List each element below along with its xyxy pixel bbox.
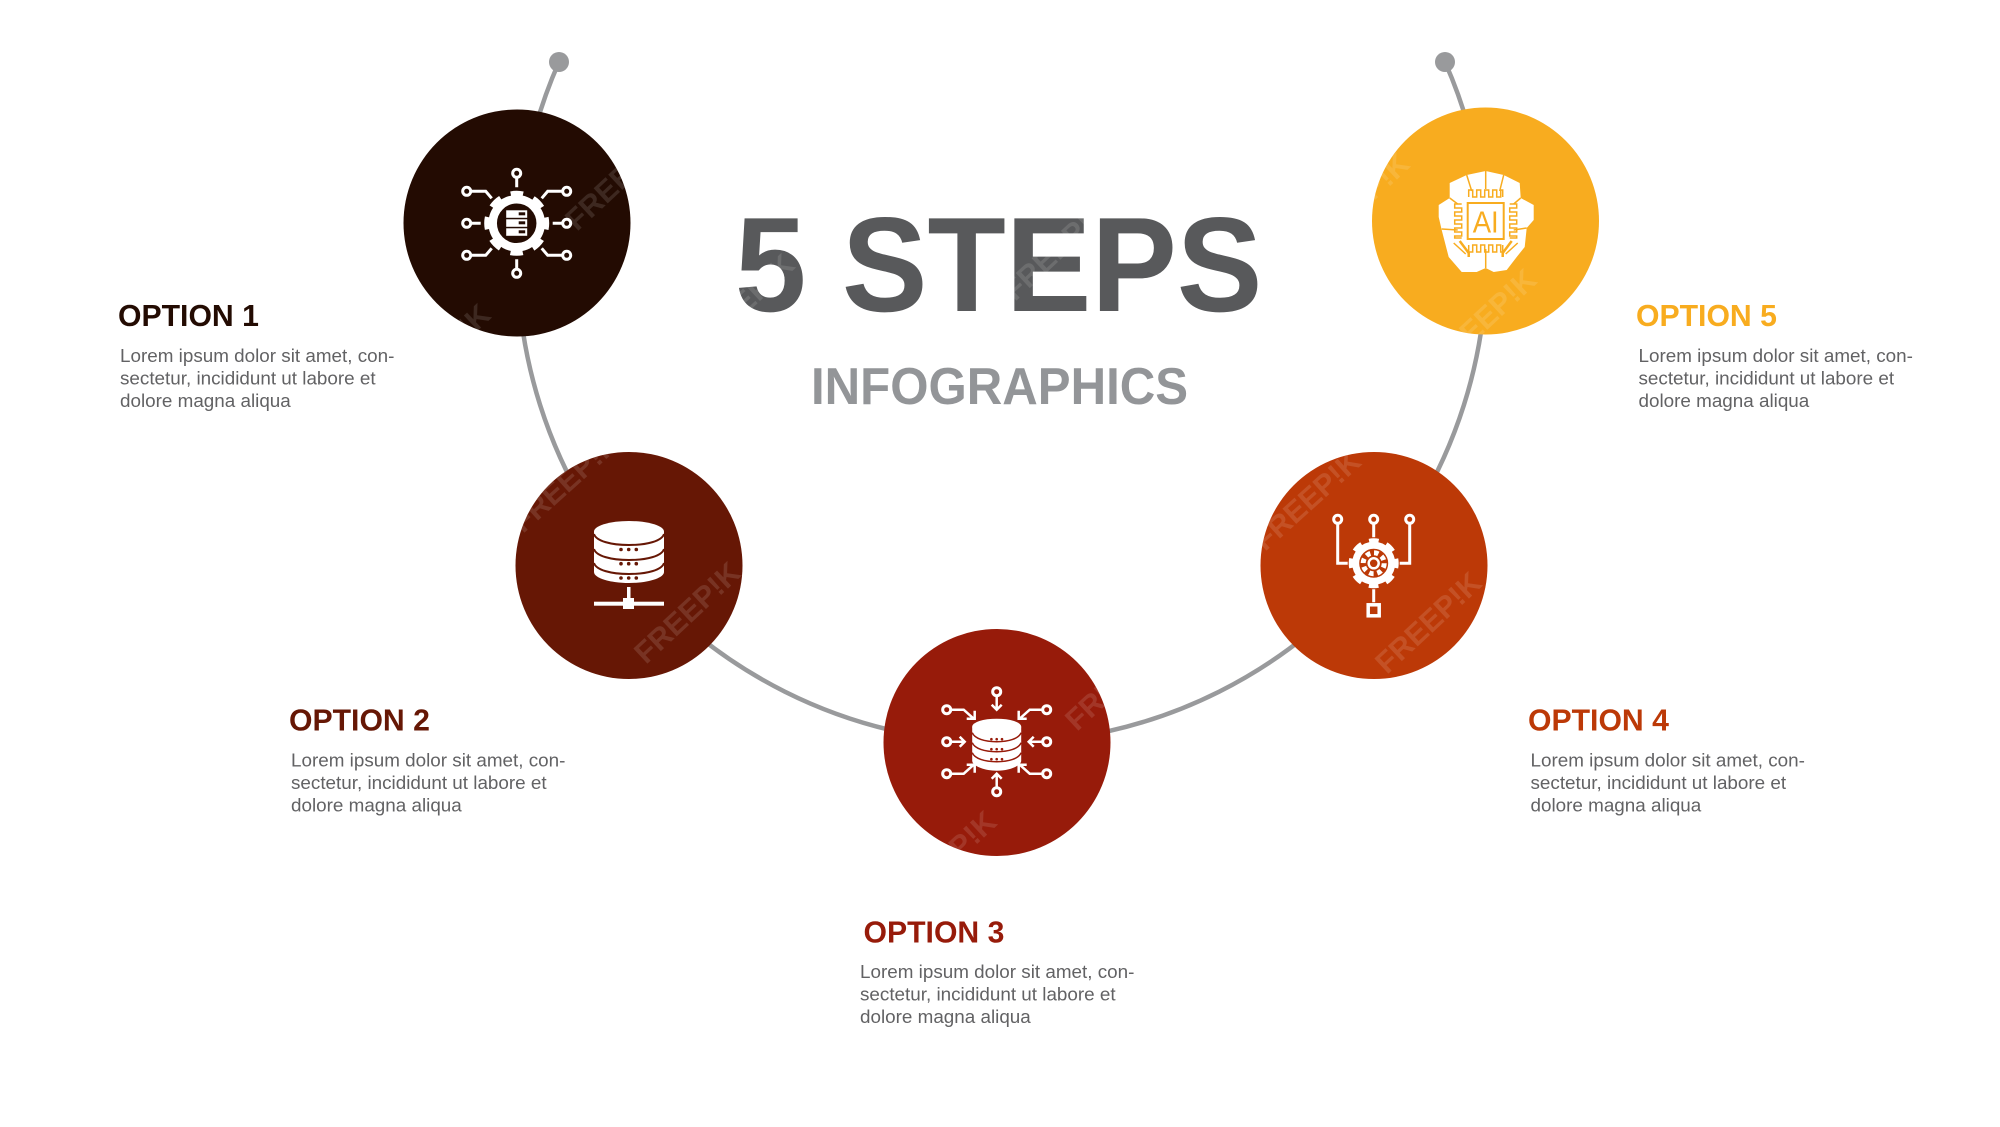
option 2 text: sectetur, incididunt ut labore et (291, 772, 547, 793)
option 1 text: Lorem ipsum dolor sit amet, con- (120, 345, 394, 366)
subtitle: INFOGRAPHICS: INFOGRAPHICS (811, 357, 1188, 415)
icon: gear with server and circuit nodes (463, 169, 571, 277)
icon: gear with circuit lines (1334, 515, 1414, 616)
step 5 circle: FREEP!K (1424, 263, 1543, 377)
option 2 text: Lorem ipsum dolor sit amet, con- (291, 750, 565, 770)
title: 5 STEPS: FREEP!K (997, 193, 1116, 307)
icon: AI chip brain: AI (1473, 204, 1499, 240)
option 4 text: OPTION 4 (1528, 704, 1669, 738)
option 4 text: dolore magna aliqua (1530, 794, 1702, 816)
option 5 text: Lorem ipsum dolor sit amet, con- (1638, 345, 1913, 366)
connecting arc with end dots (517, 52, 1487, 743)
option 2 text (289, 704, 565, 816)
title: 5 STEPS (739, 217, 1258, 312)
option 3 text (860, 916, 1134, 1027)
option 2 text: dolore magna aliqua (291, 794, 462, 816)
option 5 text (1636, 300, 1913, 411)
step 1 circle: FREEP!K (559, 123, 678, 237)
step 2 circle: FREEP!K (506, 426, 626, 539)
step 1 circle: FREEP!K (378, 298, 497, 412)
icon: database on network (594, 521, 664, 609)
option 1 text: dolore magna aliqua (120, 390, 291, 411)
option 5 text: sectetur, incididunt ut labore et (1638, 368, 1895, 388)
step 4 circle: FREEP!K (1248, 444, 1368, 557)
option 3 text: dolore magna aliqua (860, 1006, 1031, 1027)
option 4 text (1528, 704, 1805, 816)
option 1 text: OPTION 1 (118, 300, 259, 333)
option 3 text: sectetur, incididunt ut labore et (860, 984, 1116, 1004)
step 1 circle (404, 110, 630, 336)
icon: database with incoming arrows (943, 688, 1051, 796)
option 4 text: Lorem ipsum dolor sit amet, con- (1530, 750, 1805, 770)
step 2 circle (516, 452, 742, 679)
option 1 text (118, 300, 394, 411)
step 5 circle: FREEP!K (1297, 147, 1416, 261)
title: 5 STEPS: 5 STEPS (735, 189, 1262, 340)
option 4 text: sectetur, incididunt ut labore et (1530, 772, 1787, 793)
option 2 text: OPTION 2 (289, 704, 430, 738)
title: 5 STEPS: FREEP!K (682, 248, 801, 362)
option 5 text: dolore magna aliqua (1638, 390, 1810, 411)
step 3 circle: FREEP!K (1059, 623, 1178, 737)
option 1 text: sectetur, incididunt ut labore et (120, 368, 376, 388)
step 5 circle (1372, 108, 1599, 334)
step 4 circle (1248, 444, 1488, 680)
option 3 text: Lorem ipsum dolor sit amet, con- (860, 961, 1134, 982)
step 3 circle (884, 629, 1110, 856)
icon: AI chip brain (1439, 171, 1534, 272)
step 3 circle: FREEP!K (884, 805, 1003, 919)
option 5 text: OPTION 5 (1636, 300, 1777, 333)
option 3 text: OPTION 3 (864, 916, 1004, 950)
step 2 circle: FREEP!K (628, 556, 747, 670)
step 4 circle: FREEP!K (1369, 566, 1488, 680)
